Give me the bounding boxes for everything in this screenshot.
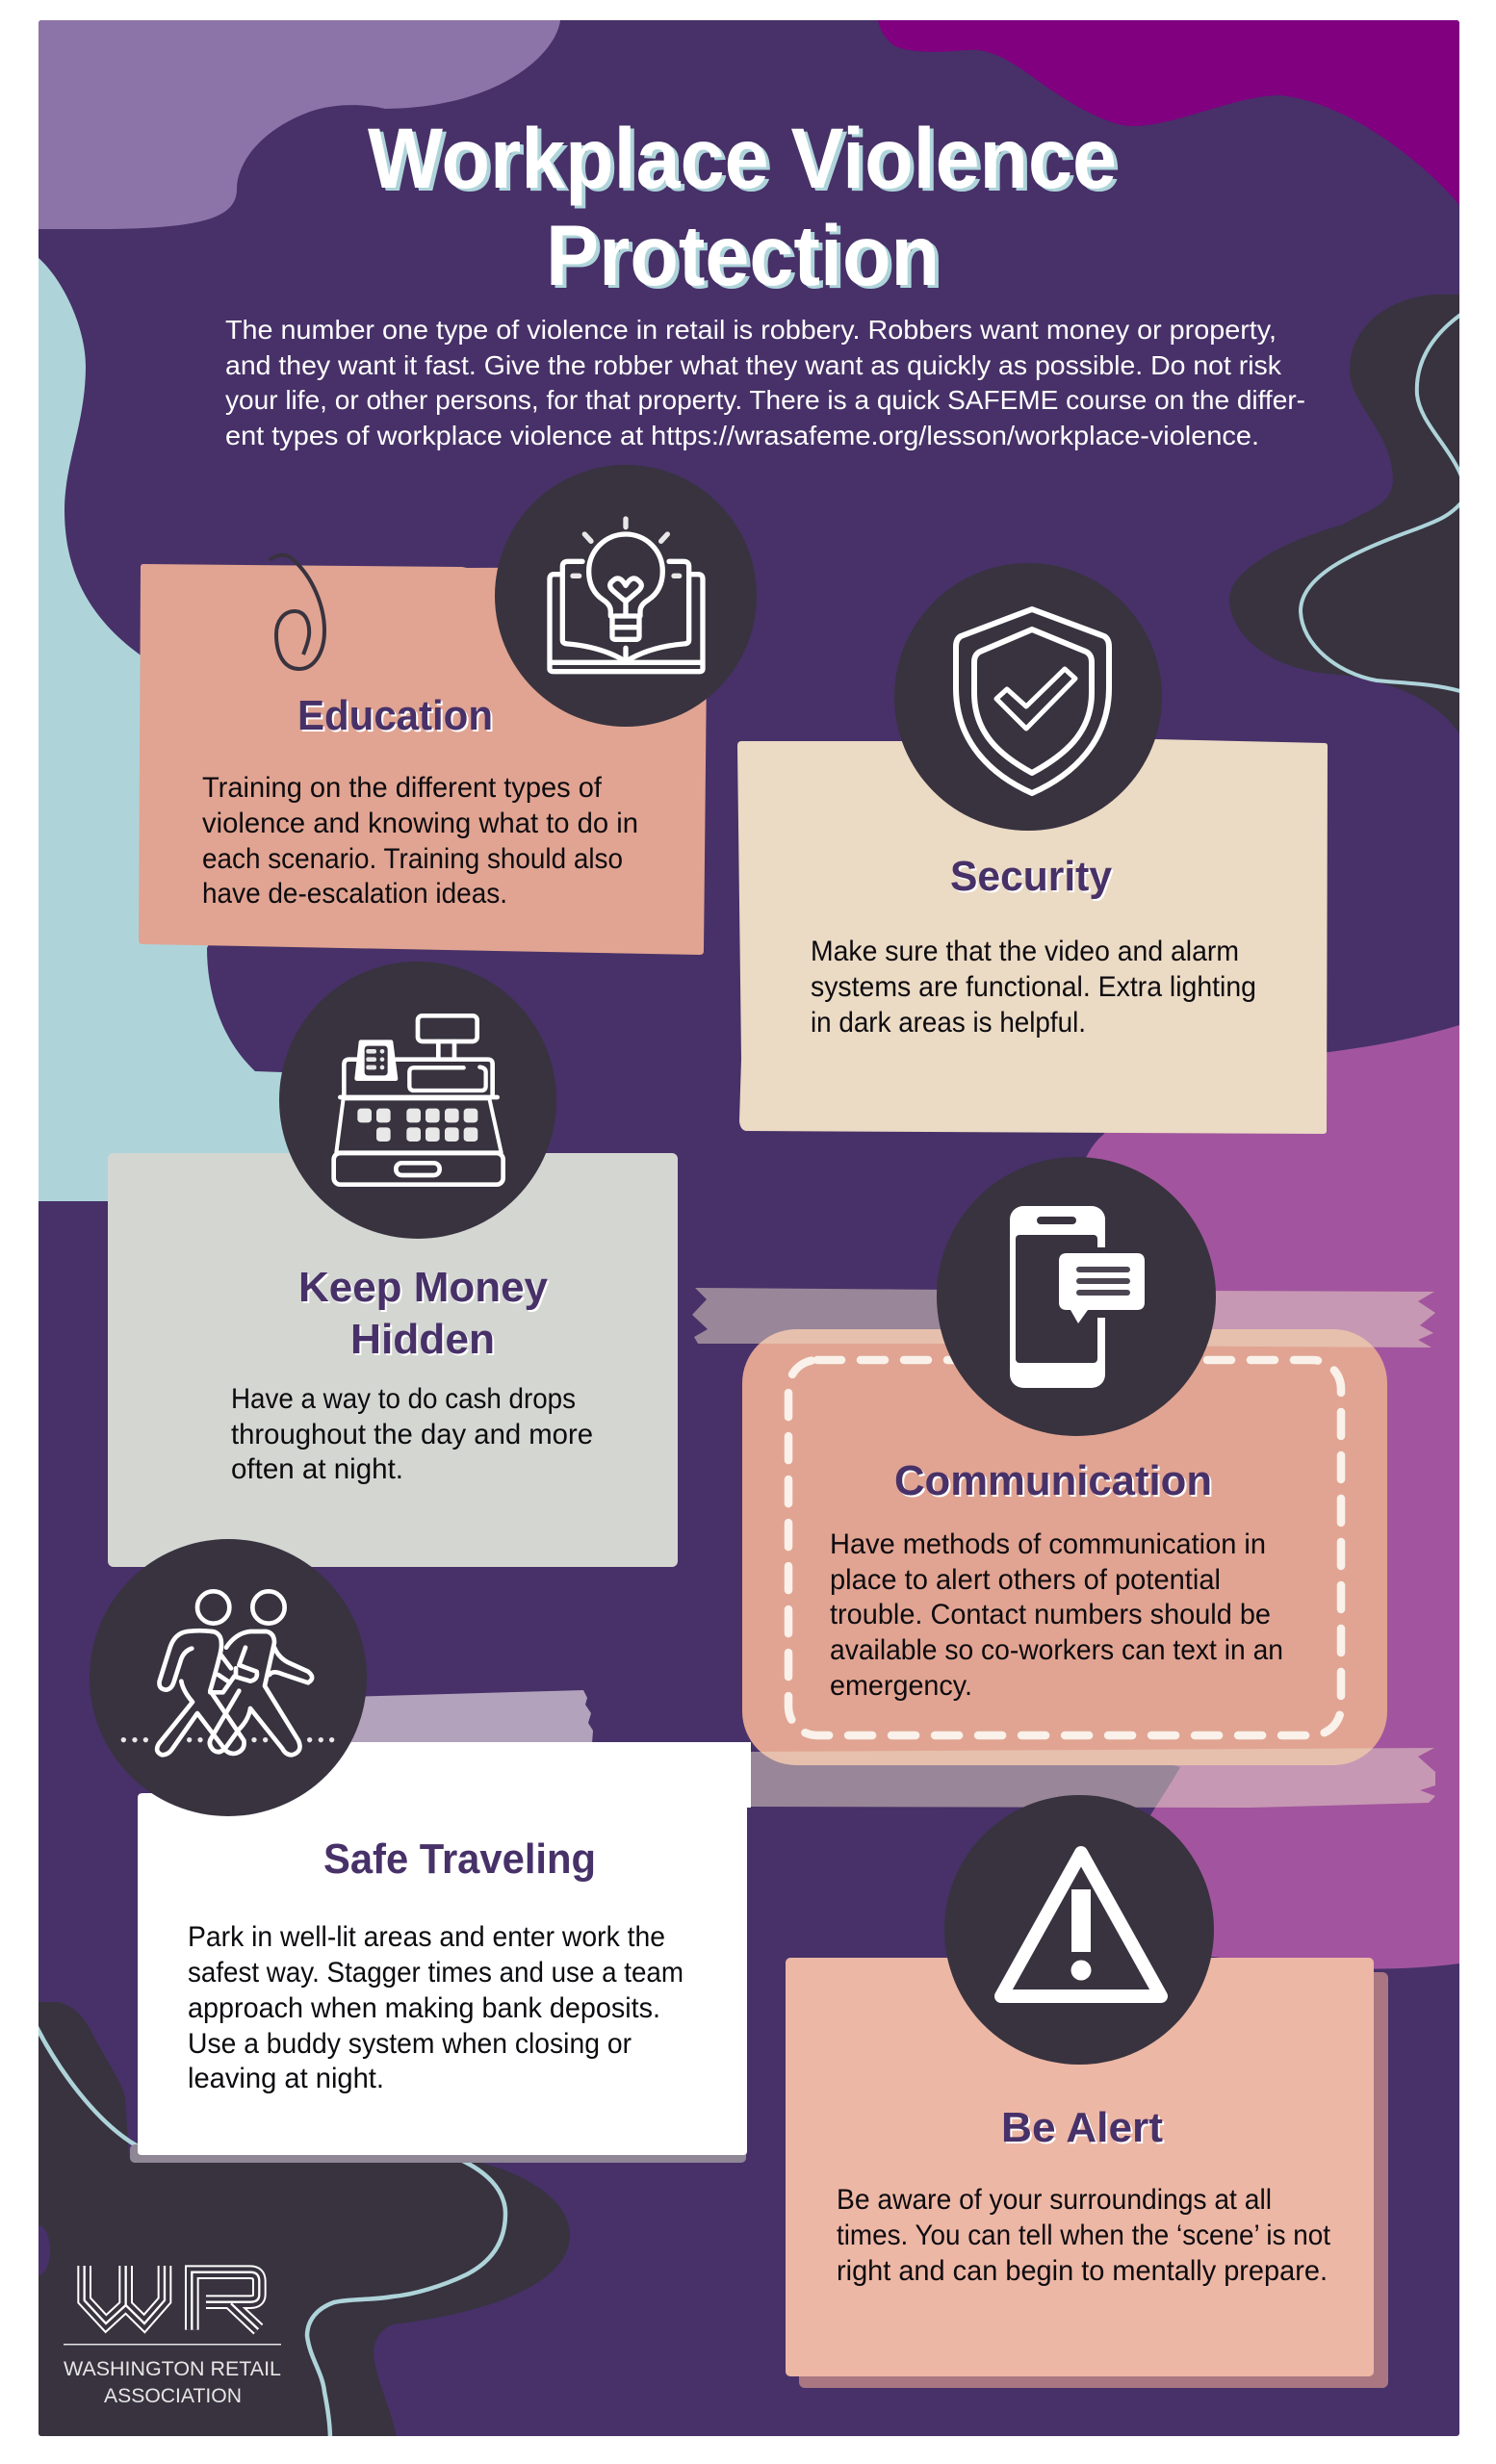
intro text block: The number one type of violence in retail is robbery. Robbers want money or property, xyxy=(225,315,1277,345)
title: Workplace Violence xyxy=(372,113,1121,209)
logo: Washington Retail Association: WASHINGTON RETAIL xyxy=(64,2358,281,2380)
heading: communication: Communication xyxy=(896,1459,1214,1506)
title: Protection xyxy=(550,210,943,306)
text: security xyxy=(811,936,1256,1039)
text: education xyxy=(202,772,638,910)
dashed stitching xyxy=(788,1360,1341,1735)
text: communication: Have methods of communication in xyxy=(830,1528,1266,1560)
icon: cash register xyxy=(279,962,556,1239)
heading: keep money hidden: Keep Money xyxy=(300,1266,551,1313)
text: safe traveling: safest way. Stagger times and use a team xyxy=(188,1957,684,1989)
icon: warning triangle xyxy=(944,1795,1214,2065)
panel: security xyxy=(737,563,1328,1134)
panel: safe traveling xyxy=(90,1539,751,2163)
title: Protection xyxy=(546,207,940,303)
heading: keep money hidden xyxy=(298,1264,551,1365)
logo: Washington Retail Association xyxy=(64,2266,281,2407)
text: be alert: times. You can tell when the ‘scene’ is not xyxy=(837,2220,1331,2251)
text: safe traveling: leaving at night. xyxy=(188,2063,384,2094)
heading: security: Security xyxy=(952,855,1115,902)
icon: two people walking xyxy=(90,1539,367,1816)
tape: communication top xyxy=(692,1288,1435,1348)
intro text block: your life, or other persons, for that property. There is a quick SAFEME course on the differ- xyxy=(225,385,1305,415)
text: education: violence and knowing what to do in xyxy=(202,808,638,839)
heading: communication: Communication xyxy=(894,1457,1212,1504)
text: be alert xyxy=(837,2184,1331,2287)
logo: Washington Retail Association: ASSOCIATION xyxy=(104,2385,242,2407)
heading: be alert: Be Alert xyxy=(1003,2106,1165,2153)
text: education: each scenario. Training should also xyxy=(202,843,623,875)
heading: keep money hidden: Hidden xyxy=(350,1316,495,1363)
text: communication xyxy=(830,1528,1283,1702)
text: keep money hidden xyxy=(231,1383,593,1485)
text: be alert: right and can begin to mentally prepare. xyxy=(837,2255,1328,2287)
text: safe traveling: Use a buddy system when closing or xyxy=(188,2028,632,2060)
text: keep money hidden: often at night. xyxy=(231,1453,403,1485)
tape: communication bottom xyxy=(750,1748,1435,1808)
icon: book and light bulb xyxy=(495,465,757,727)
icon: phone with message bubble xyxy=(937,1157,1216,1436)
heading: be alert: Be Alert xyxy=(1001,2104,1163,2151)
text: keep money hidden: Have a way to do cash drops xyxy=(231,1383,576,1415)
heading: education: Education xyxy=(299,694,495,741)
text: security: in dark areas is helpful. xyxy=(811,1007,1086,1039)
text: communication: emergency. xyxy=(830,1670,972,1702)
title xyxy=(368,110,1121,306)
text: communication: trouble. Contact numbers should be xyxy=(830,1599,1271,1630)
text: education: have de-escalation ideas. xyxy=(202,878,507,910)
text: be alert: Be aware of your surroundings at all xyxy=(837,2184,1272,2216)
intro text block: ent types of workplace violence at https://wrasafeme.org/lesson/workplace-violence. xyxy=(225,421,1259,450)
text: security: Make sure that the video and alarm xyxy=(811,936,1239,967)
title: Workplace Violence xyxy=(368,110,1117,206)
text: keep money hidden: throughout the day and more xyxy=(231,1419,593,1450)
tape: safe traveling xyxy=(337,1690,593,1744)
heading: keep money hidden: Keep Money xyxy=(298,1264,549,1311)
heading: safe traveling: Safe Traveling xyxy=(323,1835,596,1883)
icon: spiral paperclip xyxy=(270,555,324,669)
heading: education: Education xyxy=(297,692,493,739)
text: safe traveling: approach when making bank deposits. xyxy=(188,1992,660,2024)
panel: be alert xyxy=(786,1795,1388,2388)
card shadow xyxy=(130,2144,746,2163)
text: safe traveling: Park in well-lit areas and enter work the xyxy=(188,1921,665,1953)
panel: keep money hidden xyxy=(108,962,678,1567)
intro text block xyxy=(225,315,1305,450)
heading: security: Security xyxy=(950,853,1113,900)
intro text block: and they want it fast. Give the robber what they want as quickly as possible. Do not risk xyxy=(225,350,1282,380)
panel: communication xyxy=(692,1157,1435,1808)
text: communication: place to alert others of potential xyxy=(830,1564,1221,1596)
text: education: Training on the different types of xyxy=(202,772,603,804)
text: communication: available so co-workers can text in an xyxy=(830,1634,1283,1666)
panel: education xyxy=(139,465,757,955)
icon: shield with check xyxy=(894,563,1162,831)
heading: keep money hidden: Hidden xyxy=(352,1318,497,1365)
text: security: systems are functional. Extra lighting xyxy=(811,971,1256,1003)
text: safe traveling xyxy=(188,1921,684,2094)
